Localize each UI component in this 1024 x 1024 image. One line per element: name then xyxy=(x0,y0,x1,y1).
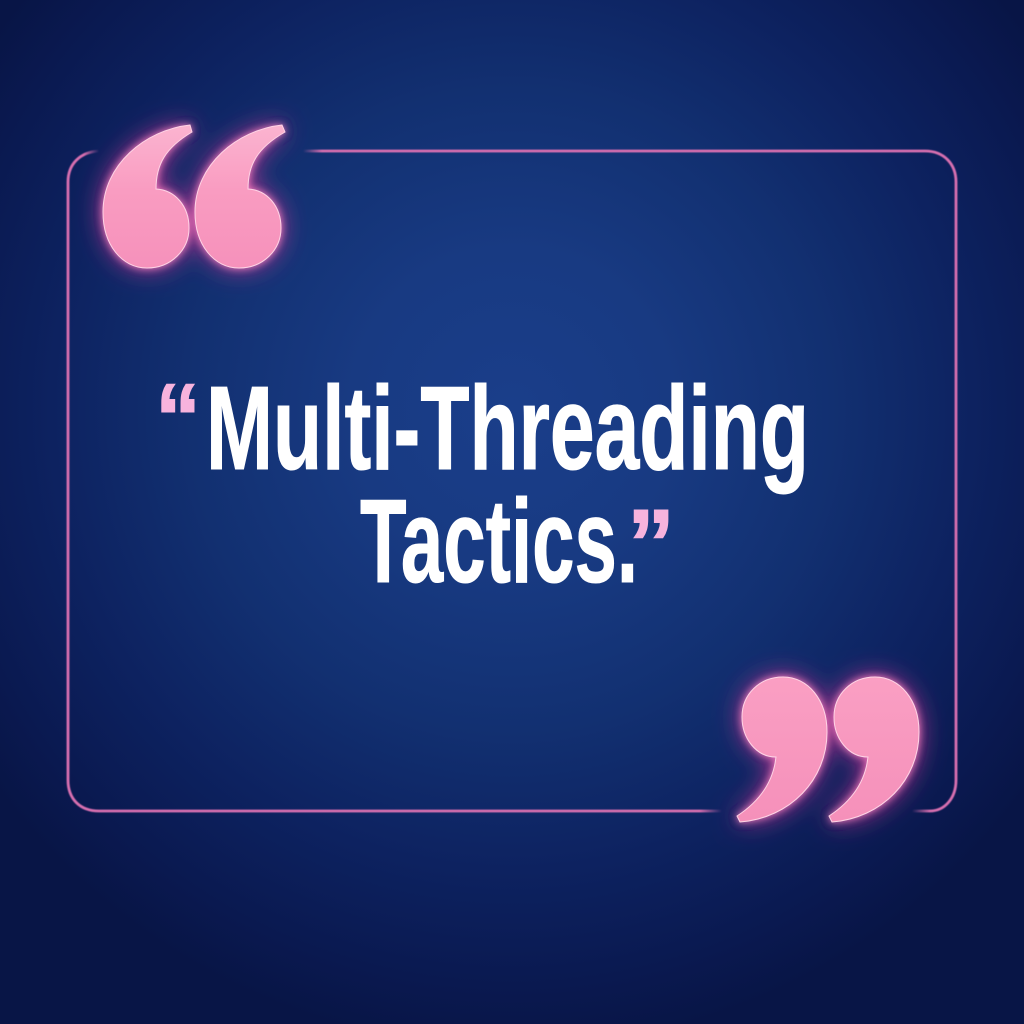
icon: closing quotation mark xyxy=(737,677,919,822)
title line 2: Tactics. xyxy=(360,475,638,608)
icon: opening quotation mark xyxy=(103,125,285,268)
small closing quote: ” xyxy=(627,489,675,599)
quote frame xyxy=(68,151,956,811)
small opening quote: “ xyxy=(155,363,201,473)
title: Multi-Threading Tactics xyxy=(155,362,809,608)
